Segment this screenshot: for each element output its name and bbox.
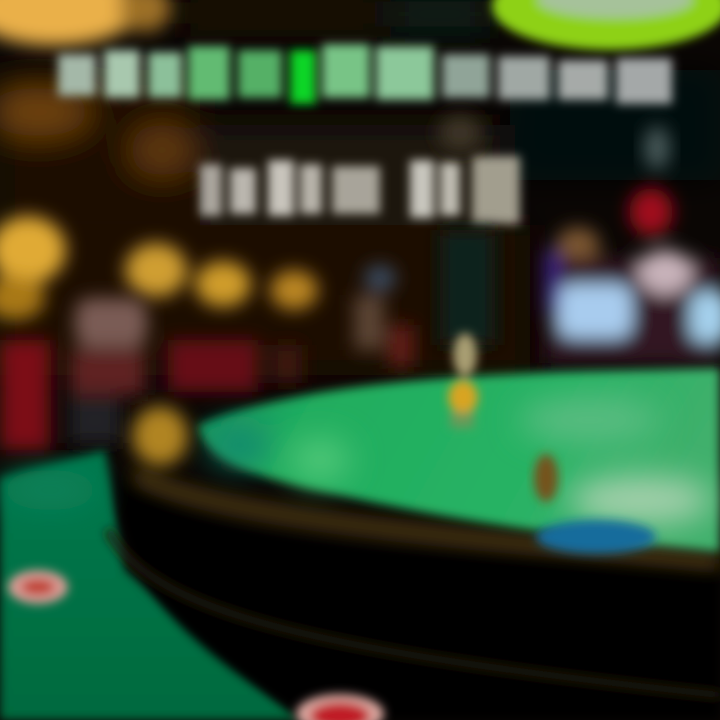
lamp row: gold lights [0, 216, 318, 320]
floor highlight: left teal [0, 470, 100, 510]
logo ring: top right lime [492, 0, 720, 50]
ceiling light: top left gold glow [0, 0, 171, 46]
poker chip: bottom centre [296, 694, 384, 720]
dealer figure: yellow centre of table [448, 333, 478, 428]
blue object: near table edge [536, 520, 656, 554]
poker chip: lower left [8, 570, 68, 604]
table rim: black curved edge [108, 470, 720, 720]
table rim: wood edge [135, 475, 720, 562]
crowd: right group in blue shirts [545, 188, 720, 363]
heading line 2: illegible blurred subtitle [200, 156, 520, 224]
small mark: right of heading [644, 126, 670, 170]
poker table: green felt [198, 368, 720, 552]
standing figure: centre background [438, 115, 495, 345]
table highlights: pale felt patches [210, 396, 712, 524]
crowd: left group in red and brown [0, 265, 414, 450]
floor: green carpet [0, 450, 300, 720]
background: upper room glow [0, 0, 720, 375]
heading line 1: illegible blurred title [58, 44, 672, 104]
player piece: brown figure on table [534, 454, 558, 502]
gold object: table edge left [132, 406, 188, 466]
